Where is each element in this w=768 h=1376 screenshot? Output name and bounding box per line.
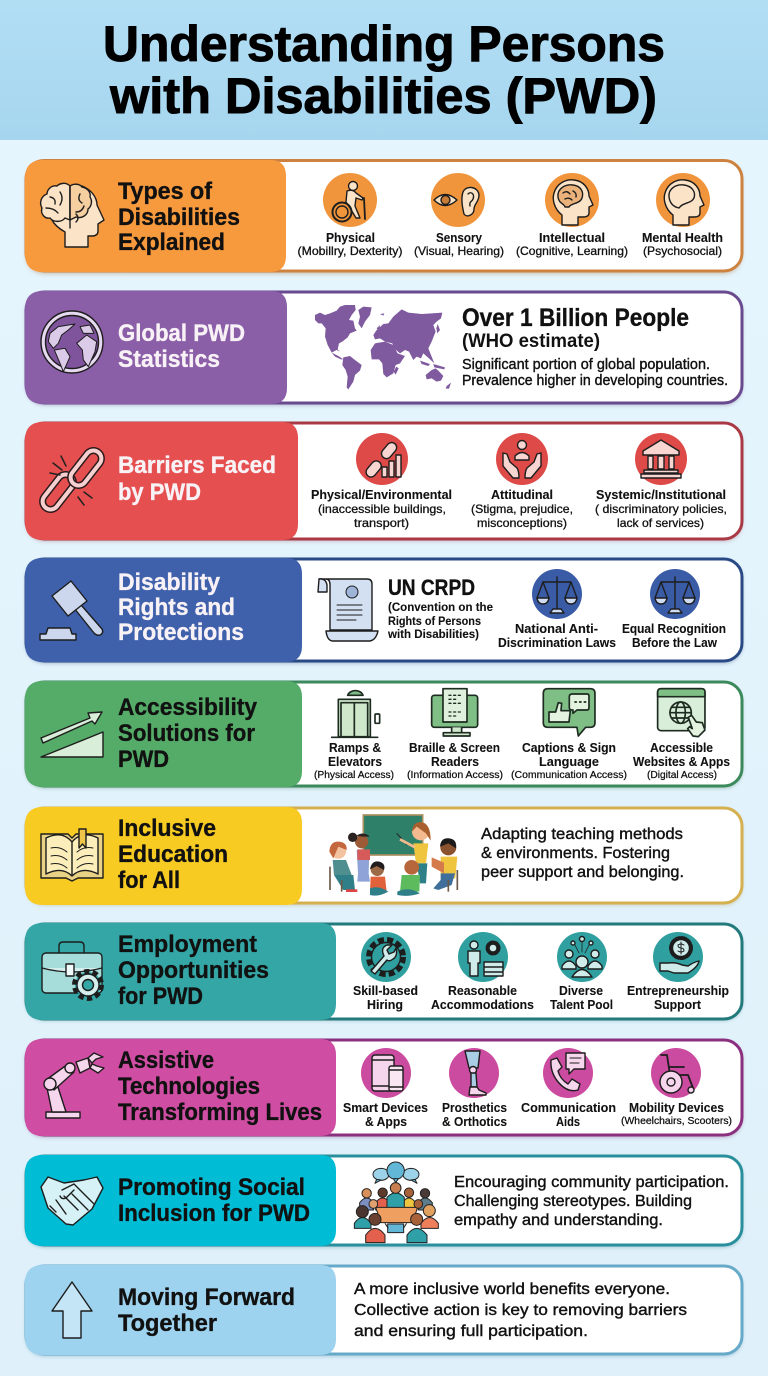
text: social inclusion description — [454, 1174, 729, 1229]
label: mental health — [642, 231, 723, 258]
panel: employment: Opportunities — [118, 957, 269, 984]
icon: attitudinal — [496, 433, 548, 485]
label: sensory: Sensory — [436, 231, 482, 245]
heading: accessibility: Accessibility — [118, 694, 258, 721]
icon: UN document scroll — [318, 579, 378, 641]
text: moving forward description: A more inclusive world benefits everyone. — [354, 1281, 670, 1298]
heading: barriers: Barriers Faced — [118, 452, 276, 479]
panel: global statistics — [25, 291, 742, 405]
label: entrepreneurship — [627, 984, 729, 1012]
label: skill-based: Hiring — [367, 998, 403, 1012]
icon: handshake — [41, 1177, 103, 1225]
header band with title: Understanding Persons — [103, 16, 665, 72]
panel: moving forward: Together — [118, 1310, 217, 1337]
heading: assistive: Assistive — [118, 1047, 214, 1074]
heading: social inclusion: Promoting Social — [118, 1174, 305, 1201]
heading: rights: Disability — [118, 569, 221, 596]
label: communication: Communication — [521, 1101, 616, 1115]
panel: employment — [25, 923, 742, 1020]
heading: types of disabilities: Types of — [118, 178, 213, 205]
label: entrepreneurship: Entrepreneurship — [627, 984, 729, 998]
icon: captions chat — [543, 689, 595, 736]
header band with title — [0, 0, 768, 140]
panel: assistive technology — [25, 1039, 742, 1137]
label: prosthetics: Prosthetics — [442, 1101, 507, 1115]
label: mobility devices: Mobility Devices — [629, 1101, 724, 1115]
label: accommodations — [431, 984, 534, 1012]
heading: education: Inclusive — [118, 815, 216, 842]
panel: education: Education — [118, 841, 228, 868]
label: braille: (Information Access) — [407, 770, 503, 781]
label: equal recognition: Equal Recognition — [622, 622, 726, 636]
panel: social inclusion: Inclusion for PWD — [118, 1200, 310, 1227]
label: national laws — [498, 622, 616, 650]
panel: accessibility: Solutions for — [118, 720, 255, 747]
label: intellectual: Intellectual — [539, 231, 605, 245]
illustration: community group — [354, 1162, 438, 1243]
text: convention — [387, 600, 493, 641]
panel: education: for All — [118, 867, 180, 894]
panel: rights — [25, 558, 742, 663]
label: physical environmental: (inaccessible buildings, — [318, 502, 446, 516]
text: education description — [481, 826, 684, 881]
panel: education — [25, 807, 742, 905]
label: systemic institutional: ( discriminatory policies, — [595, 502, 727, 516]
icon: robot arm — [44, 1053, 104, 1118]
text: moving forward description: and ensuring full participation. — [354, 1323, 588, 1340]
icon: prosthetic leg — [449, 1048, 499, 1098]
label: attitudinal: Attitudinal — [491, 488, 553, 502]
label: systemic institutional: Systemic/Institutional — [596, 488, 726, 502]
label: ramps and elevators: Ramps & — [329, 741, 381, 755]
label: attitudinal: misconceptions) — [477, 516, 567, 530]
label: smart devices: & Apps — [365, 1115, 407, 1129]
icon: broken chain — [39, 447, 105, 513]
text: social inclusion description: Challenging stereotypes. Building — [454, 1193, 692, 1210]
label: intellectual — [516, 231, 628, 258]
label: captions: Language — [539, 755, 599, 769]
text: convention: Rights of Persons — [388, 614, 481, 628]
icon: gavel — [40, 581, 103, 640]
label: physical environmental: transport) — [354, 516, 409, 530]
statistic description: Significant portion of global population. — [462, 357, 710, 373]
label: captions: (Communication Access) — [511, 770, 627, 781]
label: braille — [407, 741, 503, 781]
icon: web hand — [658, 689, 705, 737]
icon: physical disability — [323, 173, 377, 227]
label: mobility devices — [621, 1101, 732, 1127]
text: convention: with Disabilities) — [387, 627, 479, 641]
label: communication — [521, 1101, 616, 1129]
label: ramps and elevators: (Physical Access) — [314, 770, 394, 781]
icon: talent pool — [557, 932, 607, 982]
label: mental health: (Psychosocial) — [643, 244, 722, 258]
icon: smart devices — [361, 1048, 411, 1098]
icon: briefcase and gear — [42, 942, 102, 998]
label: systemic institutional: lack of services) — [617, 516, 704, 530]
illustration: classroom — [329, 815, 457, 896]
statistic description: Prevalence higher in developing countries. — [462, 373, 728, 389]
icon: entrepreneurship — [653, 932, 703, 982]
icon: scales — [532, 569, 582, 619]
text: moving forward description: Collective action is key to removing barriers — [354, 1302, 687, 1319]
icon: physical barrier — [356, 433, 408, 485]
text: moving forward description — [354, 1281, 687, 1340]
label: smart devices — [343, 1101, 428, 1129]
icon: brain in head — [41, 183, 104, 247]
icon: up arrow — [52, 1282, 92, 1338]
label: accommodations: Reasonable — [448, 984, 517, 998]
label: physical environmental — [311, 488, 452, 530]
statistic description — [462, 357, 728, 389]
text: education description: peer support and belonging. — [481, 864, 684, 881]
label: accommodations: Accommodations — [431, 998, 534, 1012]
panel: accessibility: PWD — [118, 746, 169, 773]
label: intellectual: (Cognitive, Learning) — [516, 244, 628, 258]
label: prosthetics — [442, 1101, 507, 1129]
icon: mental health head — [656, 173, 710, 227]
label: ramps and elevators — [314, 741, 394, 781]
panel: rights: Protections — [118, 619, 244, 646]
label: skill-based — [353, 984, 418, 1012]
header band with title: with Disabilities (PWD) — [109, 68, 657, 124]
panel: assistive technology: Technologies — [118, 1073, 260, 1100]
icon: intellectual head — [545, 173, 599, 227]
label: mobility devices: (Wheelchairs, Scooters) — [621, 1116, 732, 1127]
text: social inclusion description: empathy and understanding. — [454, 1212, 663, 1229]
label: smart devices: Smart Devices — [343, 1101, 428, 1115]
panel: types of disabilities: Explained — [118, 229, 225, 256]
heading: UN CRPD: UN CRPD — [388, 575, 475, 600]
label: attitudinal: (Stigma, prejudice, — [471, 502, 573, 516]
label: sensory: (Visual, Hearing) — [414, 244, 504, 258]
label: entrepreneurship: Support — [654, 998, 702, 1012]
label: communication: Aids — [556, 1115, 580, 1129]
label: websites: Websites & Apps — [633, 755, 730, 769]
icon: globe — [41, 311, 103, 373]
label: skill-based: Skill-based — [353, 984, 418, 998]
label: national laws: National Anti- — [515, 622, 598, 636]
icon: wheelchair — [651, 1048, 701, 1098]
text: social inclusion description: Encouraging community participation. — [454, 1174, 729, 1191]
icon: ramp with arrow — [41, 712, 103, 757]
label: talent pool: Talent Pool — [550, 998, 613, 1012]
panel: types of disabilities — [25, 160, 742, 274]
panel: assistive technology: Transforming Lives — [118, 1099, 322, 1126]
statistic source: (WHO estimate) — [462, 331, 600, 352]
icon: braille screen — [432, 689, 478, 736]
label: systemic institutional — [595, 488, 727, 530]
heading: global statistics: Global PWD — [118, 320, 245, 347]
label: websites: Accessible — [650, 741, 713, 755]
heading: employment: Employment — [118, 931, 257, 958]
panel: moving forward — [25, 1265, 742, 1356]
text: convention: (Convention on the — [388, 600, 493, 614]
label: physical: (Mobillry, Dexterity) — [298, 244, 403, 258]
icon: institution building — [635, 433, 687, 485]
label: physical: Physical — [326, 231, 375, 245]
text: education description: & environments. Fostering — [481, 845, 670, 862]
panel: accessibility — [25, 681, 742, 788]
label: prosthetics: & Orthotics — [442, 1115, 507, 1129]
label: national laws: Discrimination Laws — [498, 636, 616, 650]
label: equal recognition: Before the Law — [632, 636, 717, 650]
panel: global statistics: Statistics — [118, 346, 220, 373]
icon: scales equal — [650, 569, 700, 619]
icon: sensory eye and ear — [431, 173, 485, 227]
panel: types of disabilities: Disabilities — [118, 204, 240, 231]
label: physical — [298, 231, 403, 258]
label: braille: Braille & Screen — [409, 741, 500, 755]
statistic: over 1 billion: Over 1 Billion People — [462, 304, 689, 332]
icon: accommodations — [458, 932, 508, 982]
label: braille: Readers — [431, 755, 479, 769]
icon: communication aids — [543, 1048, 593, 1098]
heading: moving forward: Moving Forward — [118, 1284, 295, 1311]
label: attitudinal — [471, 488, 573, 530]
label: sensory — [414, 231, 504, 258]
panel: employment: for PWD — [118, 983, 203, 1010]
icon: skill based gear wrench — [361, 932, 411, 982]
panel: barriers: by PWD — [118, 479, 201, 506]
label: mental health: Mental Health — [642, 231, 723, 245]
panel: social inclusion — [25, 1155, 742, 1247]
icon: open book — [41, 829, 103, 881]
text: education description: Adapting teaching methods — [481, 826, 683, 843]
label: equal recognition — [622, 622, 726, 650]
panel: barriers — [25, 422, 742, 541]
label: talent pool: Diverse — [559, 984, 603, 998]
panel: rights: Rights and — [118, 594, 235, 621]
label: captions: Captions & Sign — [522, 741, 616, 755]
label: physical environmental: Physical/Environmental — [311, 488, 452, 502]
label: websites: (Digital Access) — [647, 770, 717, 781]
icon: elevator — [332, 691, 380, 737]
world map — [315, 305, 451, 389]
label: talent pool — [550, 984, 613, 1012]
label: websites — [633, 741, 730, 781]
label: captions — [511, 741, 627, 781]
label: ramps and elevators: Elevators — [328, 755, 382, 769]
